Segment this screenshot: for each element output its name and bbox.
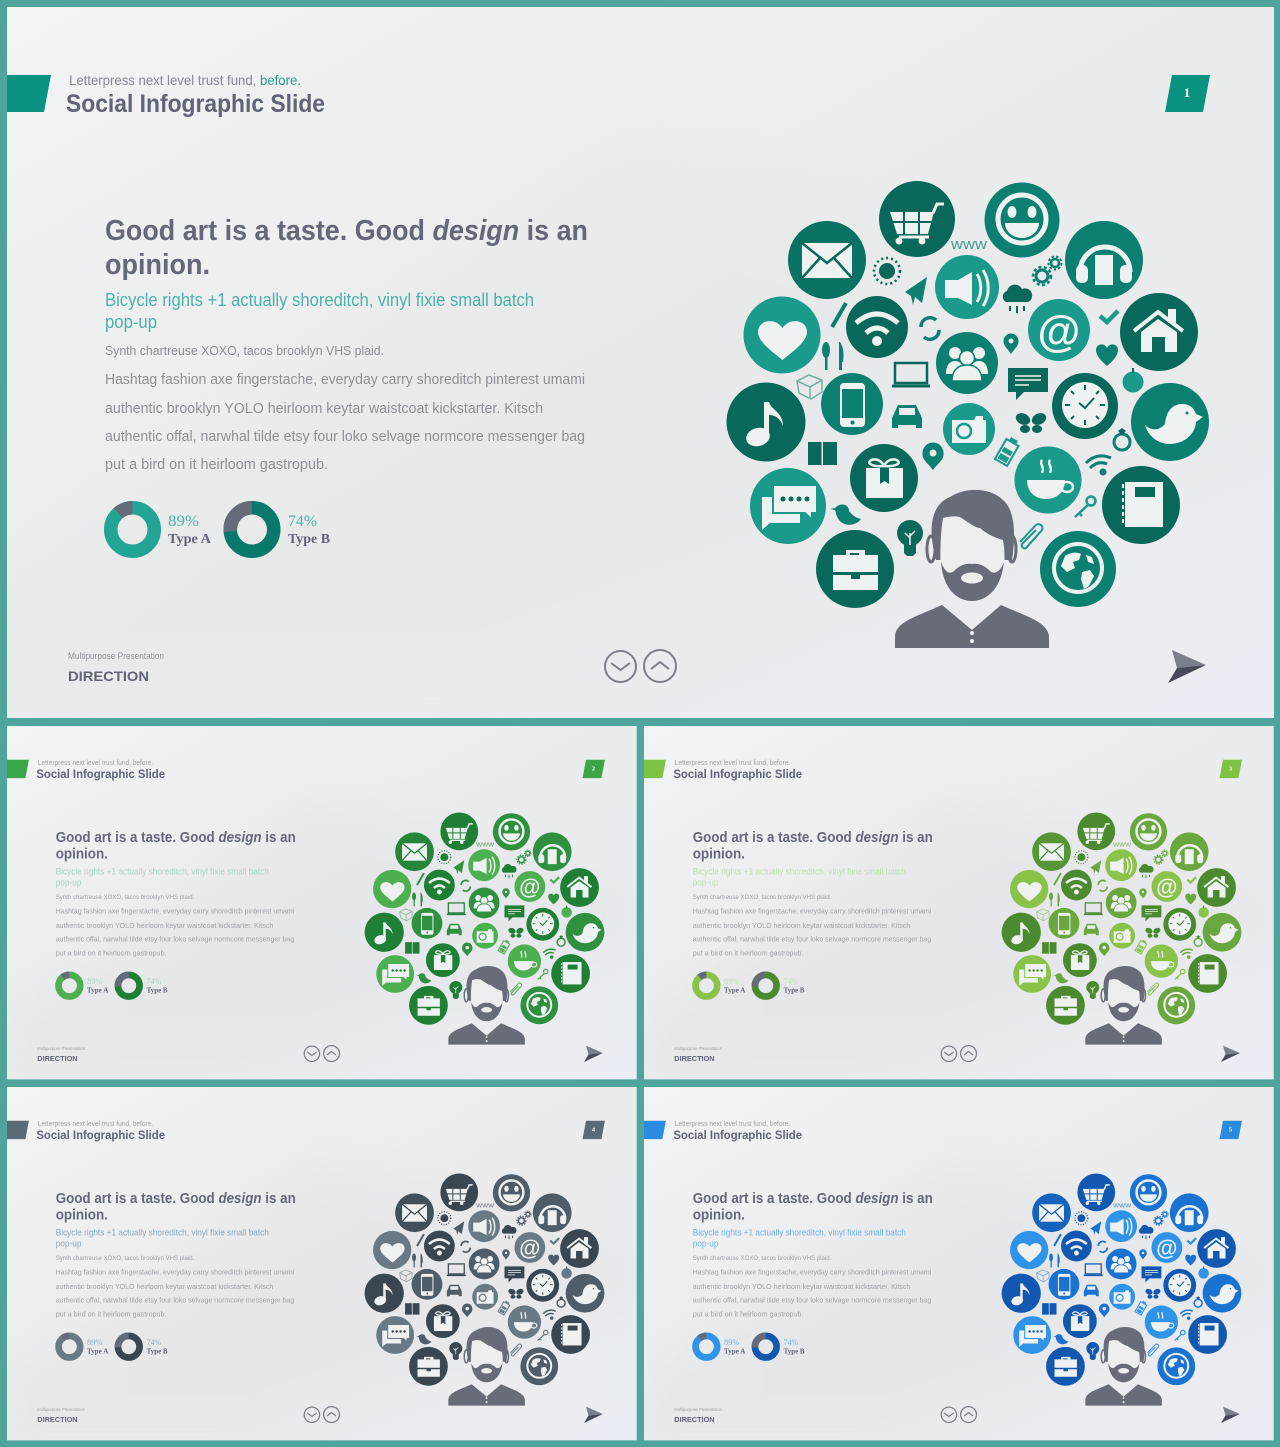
label: Type A: 89% bbox=[724, 977, 740, 986]
label: Type A: Type A bbox=[724, 1347, 745, 1355]
icon: laptop bbox=[892, 363, 930, 386]
heading line 2: opinion. bbox=[105, 249, 210, 281]
text icon: www: www bbox=[950, 237, 988, 253]
body paragraph: authentic offal, narwhal tilde etsy four loko selvage normcore messenger bag bbox=[105, 429, 585, 445]
icon cluster with person bbox=[365, 1173, 604, 1406]
icon: coffee cup bbox=[1014, 446, 1082, 514]
panel: slate slide bbox=[7, 1087, 637, 1440]
footer label bbox=[37, 1407, 85, 1424]
page number tag: 3 bbox=[1229, 766, 1232, 773]
icon: globe bbox=[1040, 531, 1116, 607]
label: Type B bbox=[288, 513, 330, 547]
label: Type B: 74% bbox=[288, 513, 317, 530]
icon: clock bbox=[1052, 373, 1118, 439]
icon: people bbox=[936, 332, 998, 394]
icon: book bbox=[808, 442, 837, 465]
label: Type A bbox=[724, 1338, 745, 1355]
body paragraph bbox=[56, 906, 295, 958]
icon: house bbox=[1120, 293, 1198, 371]
label: Type B: Type B bbox=[784, 986, 805, 994]
header title: Social Infographic Slide bbox=[66, 90, 325, 118]
header tag bbox=[644, 1121, 666, 1139]
icon: map pin large bbox=[922, 442, 944, 470]
body paragraph: Hashtag fashion axe fingerstache, everyday carry shoreditch pinterest umami bbox=[56, 1267, 295, 1276]
subtitle bbox=[693, 1228, 906, 1249]
label: Type A bbox=[87, 977, 108, 994]
heading: Good art is a taste. Good design is an bbox=[56, 1191, 296, 1207]
body paragraph: put a bird on it heirloom gastropub. bbox=[105, 457, 328, 473]
body paragraph: put a bird on it heirloom gastropub. bbox=[56, 949, 167, 958]
footer label: Multipurpose Presentation bbox=[674, 1407, 722, 1412]
footer label bbox=[68, 651, 164, 684]
body paragraph: authentic offal, narwhal tilde etsy four loko selvage normcore messenger bag bbox=[693, 935, 931, 944]
icon: check mark bbox=[1100, 311, 1118, 322]
icon: apple bbox=[1122, 368, 1144, 392]
label: Type B bbox=[147, 1338, 168, 1355]
page number tag bbox=[583, 760, 605, 778]
icon: paper plane bbox=[1221, 1407, 1240, 1423]
icon: message bubble bbox=[1008, 368, 1048, 400]
body paragraph: Hashtag fashion axe fingerstache, everyday carry shoreditch pinterest umami bbox=[105, 372, 585, 388]
heading line 2: opinion. bbox=[693, 1208, 745, 1224]
subtitle: Bicycle rights +1 actually shoreditch, vinyl fixie small batch bbox=[693, 1228, 906, 1238]
label: Type A: Type A bbox=[168, 532, 212, 547]
footer label: DIRECTION bbox=[674, 1417, 715, 1424]
label: Type A: Type A bbox=[724, 986, 745, 994]
body paragraph: authentic brooklyn YOLO heirloom keytar waistcoat kickstarter. Kitsch bbox=[105, 401, 543, 417]
icon: open box bbox=[797, 375, 822, 399]
body paragraph bbox=[693, 1267, 932, 1319]
body paragraph: authentic offal, narwhal tilde etsy four loko selvage normcore messenger bag bbox=[693, 1296, 931, 1305]
icon: light bulb bbox=[897, 520, 923, 556]
donut chart: Type B 74% bbox=[117, 1335, 140, 1358]
label: Type B: 74% bbox=[147, 977, 161, 986]
body paragraph: authentic offal, narwhal tilde etsy four loko selvage normcore messenger bag bbox=[56, 1296, 294, 1305]
label: Type B: 74% bbox=[147, 1338, 161, 1347]
icon: fork and knife bbox=[822, 342, 844, 370]
icon: music note bbox=[726, 382, 806, 462]
donut chart: Type B 74% bbox=[754, 1335, 777, 1358]
nav arrows bbox=[941, 1046, 976, 1061]
label: Type A: 89% bbox=[168, 513, 199, 530]
label: Type B bbox=[784, 1338, 805, 1355]
page number tag bbox=[1220, 1121, 1242, 1139]
icon: at sign bbox=[1028, 299, 1090, 361]
icon: map pin small bbox=[1004, 334, 1018, 354]
label: Type A bbox=[724, 977, 745, 994]
label: Type B: Type B bbox=[784, 1347, 805, 1355]
page number tag: 5 bbox=[1229, 1127, 1232, 1134]
header title: Social Infographic Slide bbox=[36, 767, 165, 781]
icon cluster with person bbox=[1002, 812, 1241, 1045]
icon: key bbox=[1075, 496, 1096, 517]
label: Type B bbox=[147, 977, 168, 994]
label: Type A bbox=[168, 513, 212, 547]
panel: main teal slide bbox=[7, 7, 1274, 718]
donut chart: Type A 89% bbox=[54, 970, 85, 1001]
heading: Good art is a taste. Good design is an bbox=[105, 215, 588, 247]
footer label: DIRECTION bbox=[68, 668, 149, 684]
icon: pencil bbox=[832, 303, 846, 327]
subtitle: pop-up bbox=[693, 878, 719, 888]
body paragraph: authentic offal, narwhal tilde etsy four loko selvage normcore messenger bag bbox=[56, 935, 294, 944]
icon: rain cloud bbox=[1003, 285, 1032, 313]
icon: heart bbox=[744, 296, 820, 374]
subtitle bbox=[56, 867, 269, 888]
icon: gift bbox=[850, 444, 918, 512]
footer label bbox=[37, 1046, 85, 1063]
icon: butterfly bbox=[1014, 411, 1048, 433]
icon: sun bbox=[874, 258, 900, 284]
label: Type B: 74% bbox=[784, 1338, 798, 1347]
subtitle bbox=[693, 867, 906, 888]
body paragraph bbox=[693, 906, 932, 958]
icon: briefcase bbox=[816, 530, 894, 608]
label: Type A: 89% bbox=[87, 977, 103, 986]
label: Type A: Type A bbox=[87, 1347, 108, 1355]
heading: Good art is a taste. Good design is an bbox=[693, 830, 933, 846]
header tag bbox=[644, 760, 666, 778]
icon: paper plane bbox=[1221, 1046, 1240, 1062]
icon: shopping cart bbox=[879, 181, 955, 257]
subtitle bbox=[56, 1228, 269, 1249]
label: Type B: 74% bbox=[784, 977, 798, 986]
icon: envelope bbox=[788, 221, 866, 299]
label: Type A: 89% bbox=[87, 1338, 103, 1347]
footer label bbox=[674, 1407, 722, 1424]
icon: headphones bbox=[1065, 221, 1143, 299]
nav arrows bbox=[941, 1407, 976, 1422]
icon: ring bbox=[1114, 428, 1130, 450]
nav arrows bbox=[304, 1046, 339, 1061]
icon: car bbox=[892, 405, 922, 428]
icon: paperclip bbox=[1020, 524, 1042, 548]
heading line 2: opinion. bbox=[56, 1208, 108, 1224]
body paragraph: Hashtag fashion axe fingerstache, everyday carry shoreditch pinterest umami bbox=[693, 906, 932, 915]
header title: Social Infographic Slide bbox=[36, 1128, 165, 1142]
header kicker: Letterpress next level trust fund, before. bbox=[69, 72, 301, 88]
header kicker: Letterpress next level trust fund, before. bbox=[675, 1121, 790, 1128]
header kicker: Letterpress next level trust fund, before. bbox=[675, 760, 790, 767]
icon: speaker bbox=[935, 255, 999, 319]
footer label: DIRECTION bbox=[674, 1056, 715, 1063]
footer label: Multipurpose Presentation bbox=[68, 651, 164, 661]
intro line: Synth chartreuse XOXO, tacos brooklyn VHS plaid. bbox=[693, 894, 832, 901]
subtitle: Bicycle rights +1 actually shoreditch, vinyl fixie small batch bbox=[693, 867, 906, 877]
footer label: DIRECTION bbox=[37, 1056, 78, 1063]
panel: green slide bbox=[7, 726, 637, 1079]
footer label bbox=[674, 1046, 722, 1063]
icon: notebook bbox=[1102, 466, 1180, 544]
body paragraph: put a bird on it heirloom gastropub. bbox=[693, 949, 804, 958]
intro line: Synth chartreuse XOXO, tacos brooklyn VHS plaid. bbox=[56, 894, 195, 901]
intro line: Synth chartreuse XOXO, tacos brooklyn VHS plaid. bbox=[56, 1255, 195, 1262]
subtitle: Bicycle rights +1 actually shoreditch, vinyl fixie small batch bbox=[56, 1228, 269, 1238]
label: Type A: 89% bbox=[724, 1338, 740, 1347]
footer label: Multipurpose Presentation bbox=[674, 1046, 722, 1051]
intro line: Synth chartreuse XOXO, tacos brooklyn VHS plaid. bbox=[105, 344, 384, 358]
icon: small wifi bbox=[1086, 456, 1111, 476]
footer label: Multipurpose Presentation bbox=[37, 1407, 85, 1412]
header tag bbox=[7, 1121, 29, 1139]
subtitle bbox=[105, 290, 534, 332]
icon: smiley bbox=[984, 182, 1060, 258]
body paragraph bbox=[105, 372, 585, 473]
icon: battery bbox=[995, 436, 1021, 466]
icon cluster with person bbox=[365, 812, 604, 1045]
donut chart: Type A 89% bbox=[691, 1331, 722, 1362]
panel: lime slide bbox=[644, 726, 1274, 1079]
nav arrows bbox=[304, 1407, 339, 1422]
body paragraph: Hashtag fashion axe fingerstache, everyday carry shoreditch pinterest umami bbox=[693, 1267, 932, 1276]
heading line 2: opinion. bbox=[56, 847, 108, 863]
page number tag bbox=[1220, 760, 1242, 778]
subtitle: pop-up bbox=[693, 1239, 719, 1249]
nav arrows bbox=[605, 650, 676, 682]
subtitle: Bicycle rights +1 actually shoreditch, vinyl fixie small batch bbox=[56, 867, 269, 877]
page number tag: 2 bbox=[592, 766, 595, 773]
page number tag bbox=[1165, 75, 1210, 112]
icon: camera bbox=[943, 403, 995, 455]
icon: phone bbox=[821, 373, 883, 435]
icon: paper plane small bbox=[905, 277, 927, 305]
subtitle: pop-up bbox=[105, 312, 157, 332]
donut chart: Type B 74% bbox=[117, 974, 140, 997]
donut chart: Type B 74% bbox=[229, 506, 275, 553]
body paragraph: authentic brooklyn YOLO heirloom keytar waistcoat kickstarter. Kitsch bbox=[693, 1282, 910, 1291]
label: Type B: Type B bbox=[147, 1347, 168, 1355]
header tag bbox=[7, 760, 29, 778]
body paragraph: authentic brooklyn YOLO heirloom keytar waistcoat kickstarter. Kitsch bbox=[56, 1282, 273, 1291]
label: Type B bbox=[784, 977, 805, 994]
subtitle: pop-up bbox=[56, 1239, 82, 1249]
intro line: Synth chartreuse XOXO, tacos brooklyn VHS plaid. bbox=[693, 1255, 832, 1262]
page number tag: 1 bbox=[1184, 85, 1190, 100]
body paragraph: put a bird on it heirloom gastropub. bbox=[693, 1310, 804, 1319]
header kicker: Letterpress next level trust fund, before. bbox=[38, 1121, 153, 1128]
icon: bird bbox=[1131, 383, 1209, 461]
donut chart: Type B 74% bbox=[754, 974, 777, 997]
footer label: Multipurpose Presentation bbox=[37, 1046, 85, 1051]
body paragraph: put a bird on it heirloom gastropub. bbox=[56, 1310, 167, 1319]
icon: refresh bbox=[921, 318, 939, 339]
heading: Good art is a taste. Good design is an bbox=[56, 830, 296, 846]
icon: chat bubbles bbox=[750, 468, 826, 544]
figure: bearded person bbox=[895, 490, 1049, 648]
donut chart: Type A 89% bbox=[54, 1331, 85, 1362]
body paragraph: authentic brooklyn YOLO heirloom keytar waistcoat kickstarter. Kitsch bbox=[56, 921, 273, 930]
donut chart: Type A 89% bbox=[691, 970, 722, 1001]
heading line 2: opinion. bbox=[693, 847, 745, 863]
icon: paper plane bbox=[584, 1046, 603, 1062]
page number tag: 4 bbox=[592, 1127, 596, 1134]
header kicker: Letterpress next level trust fund, before. bbox=[38, 760, 153, 767]
icon: gears bbox=[1033, 256, 1062, 285]
panel: blue slide bbox=[644, 1087, 1274, 1440]
header tag bbox=[7, 75, 51, 112]
icon: wifi bbox=[846, 296, 908, 358]
icon cluster with person bbox=[1002, 1173, 1241, 1406]
body paragraph: authentic brooklyn YOLO heirloom keytar waistcoat kickstarter. Kitsch bbox=[693, 921, 910, 930]
label: Type A: Type A bbox=[87, 986, 108, 994]
label: Type B: Type B bbox=[288, 532, 330, 547]
icon: paper plane bbox=[584, 1407, 603, 1423]
footer label: DIRECTION bbox=[37, 1417, 78, 1424]
subtitle: Bicycle rights +1 actually shoreditch, vinyl fixie small batch bbox=[105, 290, 534, 310]
body paragraph bbox=[56, 1267, 295, 1319]
body paragraph: Hashtag fashion axe fingerstache, everyday carry shoreditch pinterest umami bbox=[56, 906, 295, 915]
header title: Social Infographic Slide bbox=[673, 1128, 802, 1142]
icon cluster with person bbox=[726, 181, 1209, 648]
donut chart: Type A 89% bbox=[102, 499, 163, 560]
icon: small bird bbox=[830, 504, 861, 525]
label: Type B: Type B bbox=[147, 986, 168, 994]
heading: Good art is a taste. Good design is an bbox=[693, 1191, 933, 1207]
subtitle: pop-up bbox=[56, 878, 82, 888]
header title: Social Infographic Slide bbox=[673, 767, 802, 781]
page number tag bbox=[583, 1121, 605, 1139]
icon: paper plane bbox=[1168, 650, 1206, 683]
icon: small heart bbox=[1096, 344, 1118, 366]
label: Type A bbox=[87, 1338, 108, 1355]
icon: at sign: @ bbox=[1038, 307, 1080, 356]
